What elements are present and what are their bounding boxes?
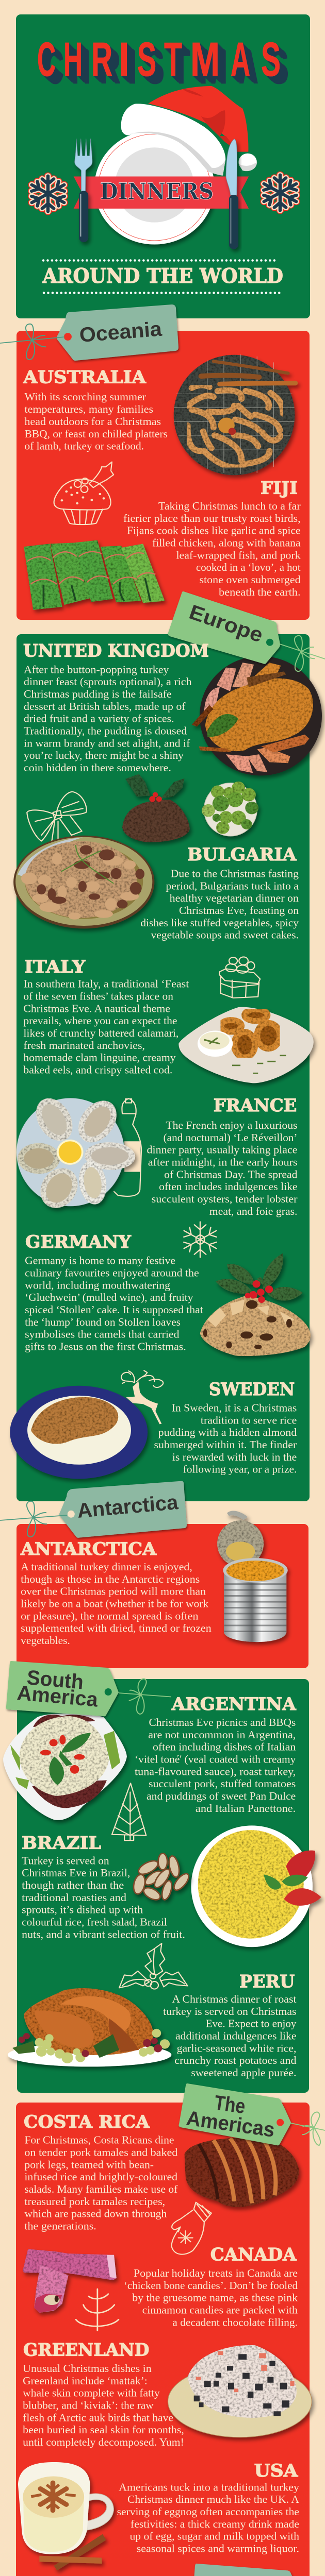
text block: Canada (124, 2267, 298, 2328)
panel: Antarctica (0, 1481, 308, 1668)
text block: Costa Rica: infused rice and brightly-coloured (24, 2171, 178, 2183)
text block: Sweden: following year, or a prize. (183, 1463, 297, 1476)
heading: Argentina: ARGENTINA (171, 1694, 296, 1715)
text block: Greenland: flesh of Arctic auk birds that have (23, 2411, 173, 2424)
subtitle: Around the World: AROUND THE WORLD (42, 264, 283, 288)
heading: France: FRANCE (214, 1095, 297, 1116)
tag: Europe (168, 591, 325, 671)
text block: France: dinner party, usually taking place (147, 1144, 297, 1156)
text block: Sweden: is rewarded with luck in the (172, 1451, 297, 1463)
text block: United Kingdom: dried fruit and a variety of spices. (24, 713, 174, 725)
tag: Antarctica: Antarctica (76, 1491, 180, 1522)
icon: mitten (172, 2202, 212, 2255)
text block: United Kingdom: dessert at British tables, made up of (24, 700, 186, 713)
text block: France: of Christmas Day. The spread (164, 1168, 298, 1180)
title: Christmas (37, 32, 281, 86)
panel: South America (3, 1661, 321, 2093)
text block: Italy: homemade clam linguine, creamy (23, 1052, 176, 1064)
text block: Brazil: though rather than the (22, 1879, 124, 1891)
tag: The Americas (178, 2083, 325, 2145)
text block: USA: festivities: a thick creamy drink made (131, 2518, 299, 2530)
heading: Antarctica: ANTARCTICA (20, 1539, 157, 1560)
text block: Antarctica: over the Christmas period will more than (21, 1585, 206, 1598)
panel: title header (16, 14, 310, 318)
text block: Canada: Popular holiday treats in Canada are (134, 2267, 298, 2279)
text block: United Kingdom: coin hidden in there somewhere. (24, 761, 171, 774)
text block: Antarctica: vegetables. (21, 1634, 70, 1647)
photo: roast turkey with grapes (8, 1988, 171, 2066)
heading: Australia: AUSTRALIA (23, 367, 147, 387)
text block: Germany: the ‘hump’ found on Stollen loaves (25, 1316, 181, 1328)
heading: Costa Rica: COSTA RICA (24, 2112, 150, 2132)
text block: Italy: prevails, where you can expect the (23, 1014, 177, 1027)
photo: beans plate (13, 836, 154, 928)
photo: roast duck with apples (192, 656, 322, 775)
text block: Argentina: Christmas Eve picnics and BBQs (149, 1716, 296, 1728)
icon: left snowflake (31, 176, 64, 211)
tag: The Americas: The (213, 2091, 247, 2118)
illustration: plate, santa hat and cutlery (74, 86, 257, 249)
photo: yellow rice bowl (191, 1825, 321, 1947)
text block: Argentina: and Italian Panettone. (196, 1802, 296, 1815)
text block: Fiji: Fijans cook dishes like garlic and spice (127, 524, 301, 537)
tag: Oceania (0, 304, 178, 361)
text block: Greenland: blubber, and ‘kiviak’: the raw (23, 2399, 154, 2411)
heading: Germany: GERMANY (25, 1232, 132, 1252)
text block: Argentina: succulent pork, stuffed tomatoes (149, 1777, 296, 1790)
photo: tin of sweetcorn (217, 1511, 288, 1642)
text block: Greenland: until completely decomposed. Yum! (23, 2436, 184, 2448)
photo: chicken bone candies (23, 2249, 117, 2313)
text block: Greenland (23, 2362, 184, 2448)
photo: mattak plate (168, 2345, 312, 2437)
text block: Canada: a decadent chocolate filling. (172, 2316, 298, 2328)
text block: Peru: sweetened apple purée. (191, 2066, 296, 2079)
text block: Peru: A Christmas dinner of roast (172, 1993, 297, 2005)
text block: Australia: With its scorching summer (25, 391, 146, 403)
text block: France: (and nocturnal) ‘Le Réveillon’ (164, 1131, 297, 1144)
text block: Costa Rica: treasured pork tamales recipes, (24, 2195, 165, 2208)
text block: Costa Rica (24, 2134, 178, 2232)
text block: United Kingdom: Christmas pudding is the failsafe (24, 688, 172, 700)
text block: Germany: symbolises the camels that carried (25, 1328, 180, 1341)
text block: Sweden: submerged within it. The finder (154, 1438, 297, 1451)
text block: France (147, 1119, 298, 1217)
icon: simple tree (76, 2289, 119, 2330)
photo: brazil nuts (132, 1853, 191, 1902)
title: Christmas: R (91, 32, 112, 86)
heading: Sweden: SWEDEN (209, 1379, 295, 1400)
icon: gift box (219, 957, 260, 998)
text block: Germany: culinary favourites enjoyed around the (25, 1266, 199, 1279)
text block: Germany: spiced ‘Stollen’ cake. It is supposed that (25, 1303, 203, 1316)
text block: Costa Rica: which are passed down through (24, 2208, 167, 2220)
heading: Bulgaria: BULGARIA (187, 844, 297, 865)
text block: Bulgaria (140, 868, 299, 941)
text block: Germany: Germany is home to many festive (25, 1255, 175, 1267)
text block: Fiji: filled chicken, along with banana (152, 537, 301, 549)
text block: Sweden: pudding with a hidden almond (158, 1426, 297, 1438)
heading: Italy: ITALY (24, 957, 86, 977)
text block: Greenland: Greenland include ‘mattak’: (23, 2375, 148, 2387)
icon: holly sprig (119, 1943, 188, 1989)
text block: Bulgaria: healthy vegetarian dinner on (170, 892, 299, 904)
text block: Fiji: stone oven submerged (199, 573, 301, 586)
text block: Argentina: and puddings of sweet Pan Dulce (147, 1790, 296, 1802)
title: Christmas: S (137, 32, 156, 86)
text block: Brazil (22, 1854, 185, 1940)
text block: Costa Rica: on tender pork tamales and baked (24, 2146, 178, 2158)
text block: USA: seasonal spices and warming liquor. (137, 2543, 299, 2555)
title: Christmas: A (231, 32, 250, 86)
text block: France: after midnight, in the early hours (148, 1156, 297, 1168)
text block: Sweden: tradition to serve rice (201, 1414, 297, 1426)
title: Christmas: M (190, 32, 220, 86)
text block: Australia (25, 391, 168, 452)
heading: United Kingdom: UNITED KINGDOM (23, 641, 209, 662)
text block: Italy: In southern Italy, a traditional ‘Feast (23, 978, 189, 990)
text block: Antarctica: likely be on a boat (whether it be for work (21, 1597, 209, 1609)
text block: Greenland: whale skin complete with fatty (23, 2387, 160, 2399)
panel: Africa (16, 2564, 325, 2576)
text block: Australia: temperatures, many families (25, 403, 153, 415)
text block: USA: Americans tuck into a traditional turkey (119, 2481, 300, 2493)
text block: Fiji: Taking Christmas lunch to a far (158, 500, 301, 512)
text block: Sweden: In Sweden, it is a Christmas (172, 1401, 297, 1414)
photo: stollen with holly (200, 1253, 311, 1356)
text block: Germany (25, 1255, 203, 1352)
text block: Greenland: Unusual Christmas dishes in (23, 2362, 152, 2375)
heading: Fiji: FIJI (261, 478, 298, 499)
icon: ribbon bow (27, 792, 87, 841)
text block: Australia: BBQ, or feast on chilled platters (25, 428, 168, 440)
photo: prawns on a round grill (174, 354, 296, 475)
tag: Africa (192, 2564, 325, 2576)
text block: Brazil: Christmas Eve in Brazil, (22, 1867, 130, 1879)
text block: Brazil: traditional roasties and (22, 1891, 127, 1904)
heading: Brazil: BRAZIL (22, 1833, 101, 1854)
icon: right snowflake (264, 175, 297, 210)
heading: Greenland: GREENLAND (23, 2340, 149, 2360)
text block: Bulgaria: dishes like stuffed vegetables, spicy (140, 917, 299, 929)
text block: Italy: Christmas Eve. A nautical theme (23, 1002, 170, 1014)
text block: Bulgaria: period, Bulgarians tuck into a (166, 879, 299, 892)
text block: France: often includes indulgences like (159, 1180, 297, 1193)
heading: Canada: CANADA (210, 2244, 297, 2265)
photo: banana leaf parcels (24, 540, 165, 610)
photo: rice pudding in blue bowl (10, 1386, 148, 1479)
text block: USA: serving of eggnog often accompanies the (117, 2505, 299, 2518)
text block: Argentina: ‘vitel toné' (veal coated with creamy (135, 1753, 296, 1765)
text block: Antarctica (21, 1561, 212, 1647)
text block: Costa Rica: salads. Many families make use of (24, 2183, 177, 2195)
text block: Germany: ‘Gluehwein’ (mulled wine), and fruity (25, 1291, 193, 1303)
tag: South America: America (16, 1682, 99, 1711)
icon: snowflake (184, 1222, 217, 1257)
text block: USA: up of egg, sugar and milk topped with (130, 2530, 300, 2543)
text block: Italy: fresh marinated anchovies, (23, 1039, 145, 1052)
photo: brussels sprouts (202, 782, 258, 836)
text block: France: meat, and foie gras. (209, 1205, 297, 1217)
text block: Fiji: cooked in a ‘lovo’, a hot (196, 561, 301, 573)
photo: calamari plate (178, 1007, 314, 1083)
text block: Antarctica: supplemented with dried, tinned or frozen (21, 1622, 212, 1634)
tag: South America: South (26, 1666, 85, 1694)
text block: Italy: baked eels, and crispy salted cod. (23, 1063, 172, 1076)
title: Christmas: C (37, 32, 56, 86)
banner word: Dinners: DINNERS (100, 178, 214, 205)
photo: Christmas pudding with holly (122, 774, 190, 842)
text block: Bulgaria: Christmas Eve, feasting on (179, 904, 299, 917)
text block: Fiji: beneath the earth. (219, 586, 301, 598)
text block: Fiji: fierier place than our trusty roast birds, (123, 512, 301, 524)
icon: leaping reindeer (121, 1370, 163, 1424)
text block: Bulgaria: Due to the Christmas fasting (171, 868, 299, 880)
text block: Costa Rica: pork legs, teamed with bean- (24, 2158, 154, 2171)
icon: fir tree (112, 1783, 146, 1840)
text block: Costa Rica: the generations. (24, 2219, 96, 2232)
text block: United Kingdom: Traditionally, the pudding is doused (24, 725, 187, 737)
photo: roast pork leg (185, 2138, 299, 2207)
text block: Antarctica: though as those in the Antarctic regions (21, 1573, 200, 1585)
text block: United Kingdom (24, 663, 192, 774)
icon: muffin with holly (54, 462, 113, 524)
tag: Oceania: Oceania (78, 317, 163, 347)
text block: Canada: by the gruesome name, as these pink (132, 2292, 298, 2304)
text block: France: The French enjoy a luxurious (166, 1119, 297, 1131)
text block: Italy (23, 978, 189, 1076)
icon: wine bottle (114, 1098, 141, 1196)
text block: Bulgaria: vegetable soups and sweet cakes. (151, 929, 299, 941)
panel: Europe (10, 591, 325, 1501)
heading: Peru: PERU (239, 1972, 295, 1992)
text block: Argentina: often including dishes of Italian (153, 1741, 296, 1753)
text block: Brazil: colourful rice, fresh salad, Brazil (22, 1916, 167, 1928)
text block: Brazil: Turkey is served on (22, 1854, 109, 1867)
text block: Costa Rica: For Christmas, Costa Ricans dine (24, 2134, 174, 2146)
text block: USA (117, 2481, 300, 2555)
text block: Italy: likes of crunchy battered calamari, (23, 1027, 178, 1039)
photo: vitel tone plate (3, 1714, 127, 1820)
text block: Antarctica: or pleasure), the normal spread is often (21, 1609, 199, 1622)
text block: United Kingdom: After the button-popping turkey (24, 663, 169, 675)
text block: Canada: cinnamon candies are packed with (142, 2304, 298, 2316)
title: Christmas: T (164, 32, 182, 86)
tag: Antarctica (0, 1481, 187, 1538)
text block: Peru: garlic-seasoned white rice, (177, 2042, 296, 2054)
text block: France: succulent oysters, tender lobster (152, 1193, 298, 1205)
title: Christmas: S (261, 32, 281, 86)
photo: oysters on ice (17, 1092, 136, 1214)
text block: Peru: turkey is served on Christmas (163, 2005, 296, 2018)
text block: United Kingdom: in warm brandy and set alight, and if (24, 737, 190, 749)
text block: Canada: ‘chicken bone candies’. Don’t be fooled (124, 2279, 298, 2292)
text block: Argentina: are not uncommon in Argentina, (148, 1728, 296, 1741)
text block: Peru: Eve. Expect to enjoy (206, 2018, 297, 2030)
text block: Fiji: leaf-wrapped fish, and pork (176, 549, 301, 561)
tag: South America (6, 1661, 171, 1716)
text block: Germany: gifts to Jesus on the first Christmas. (25, 1340, 186, 1352)
text block: Peru (163, 1993, 297, 2079)
heading: USA: USA (254, 2461, 298, 2481)
text block: Argentina: tuna-flavoured sauce), roast turkey, (135, 1765, 296, 1777)
text block: Brazil: nuts, and a vibrant selection of fruit. (22, 1928, 185, 1940)
text block: Sweden (154, 1401, 297, 1476)
text block: Fiji (123, 500, 301, 598)
text block: United Kingdom: you’re lucky, there might be a shiny (24, 749, 184, 761)
title: Christmas: H (63, 32, 83, 86)
text block: United Kingdom: dinner feast (sprouts optional), a rich (24, 675, 192, 688)
text block: Peru: additional indulgences like (175, 2030, 296, 2042)
tag: Europe: Europe (186, 601, 266, 647)
photo: eggnog mug with cinnamon (18, 2462, 113, 2570)
panel: The Americas (16, 2083, 325, 2576)
tag: The Americas: Americas (185, 2107, 276, 2142)
text block: Antarctica: A traditional turkey dinner is enjoyed, (21, 1561, 192, 1573)
text block: Italy: of the seven fishes’ takes place on (23, 990, 173, 1003)
text block: Brazil: sprouts, it’s dished up with (22, 1904, 143, 1916)
text block: Argentina (135, 1716, 296, 1815)
panel: Oceania (0, 304, 310, 620)
text block: Australia: of lamb, turkey or seafood. (25, 440, 144, 452)
text block: Greenland: been buried in seal skin for months, (23, 2424, 184, 2436)
title: Christmas: I (119, 32, 129, 86)
text block: USA: Christmas dinner much like the UK. A (127, 2493, 300, 2505)
text block: Germany: world, including mouthwatering (25, 1279, 171, 1291)
text block: Peru: crunchy roast potatoes and (174, 2054, 297, 2066)
text block: Australia: head outdoors for a Christmas (25, 415, 161, 428)
